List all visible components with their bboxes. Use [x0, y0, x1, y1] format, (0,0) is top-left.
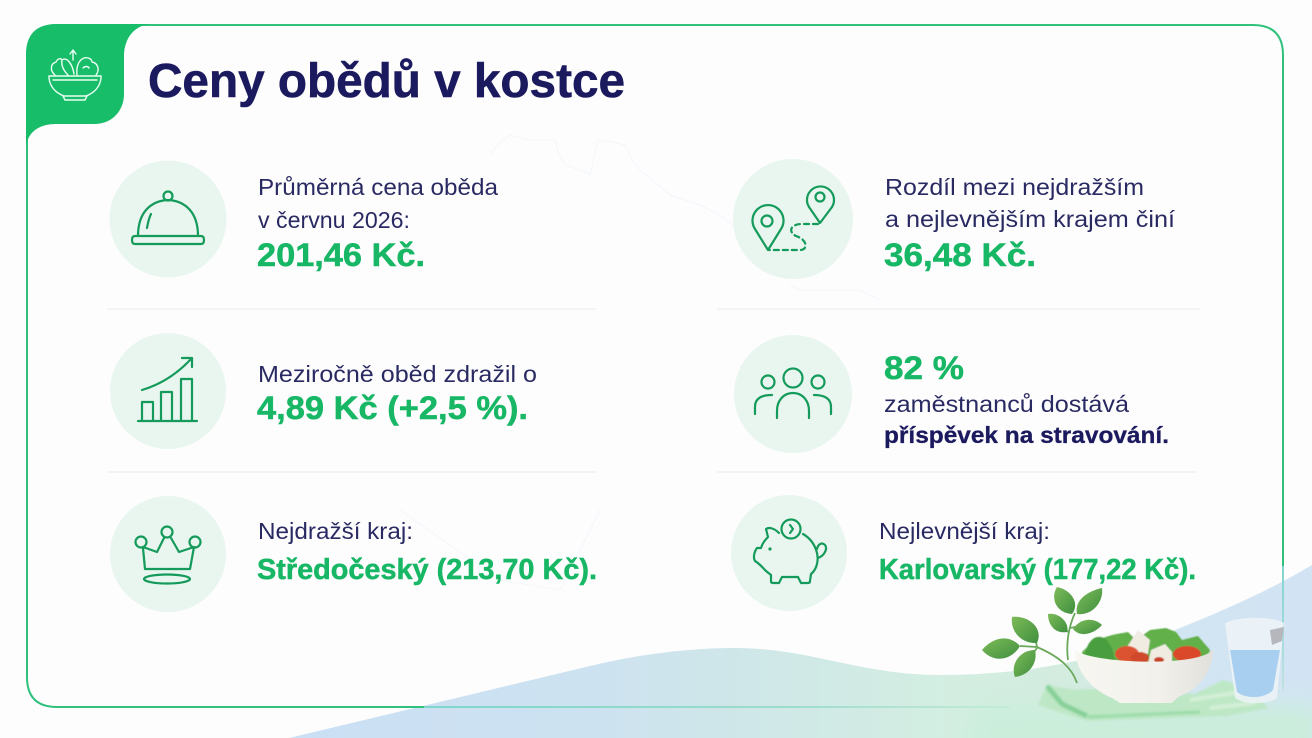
- text block: [257, 518, 597, 586]
- bowl: [1075, 650, 1213, 703]
- text block: 82 %: [884, 350, 964, 386]
- napkin: [1038, 680, 1268, 721]
- glass of water: [1225, 618, 1284, 703]
- text block: 201,46 Kč.: [257, 237, 425, 273]
- salad: [1082, 628, 1210, 664]
- background wave: [289, 565, 1312, 738]
- text block: 4,89 Kč (+2,5 %).: [257, 390, 528, 426]
- panel: regional difference: [733, 159, 1176, 279]
- text block: [884, 350, 1169, 448]
- text block: v červnu 2026:: [258, 207, 410, 233]
- header tab: [26, 24, 151, 148]
- title: Ceny obědů v kostce: [148, 55, 625, 108]
- text block: a nejlevnějším krajem činí: [885, 206, 1176, 232]
- icon: cloche: [110, 160, 226, 278]
- icon: salad bowl: [49, 50, 101, 100]
- text block: Nejdražší kraj:: [258, 518, 413, 544]
- panel: meal allowance: [734, 335, 1169, 453]
- text block: [884, 174, 1176, 273]
- illustration: salad and water: [982, 587, 1284, 721]
- dividers: [107, 309, 1200, 472]
- panel: year on year: [110, 333, 537, 449]
- text block: [257, 361, 537, 426]
- text block: [257, 174, 498, 273]
- text block: příspěvek na stravování.: [884, 422, 1169, 448]
- icon: map pins: [733, 159, 853, 279]
- icon: people: [734, 335, 852, 453]
- text block: Meziročně oběd zdražil o: [258, 361, 537, 387]
- panel: average price: [110, 160, 498, 278]
- text block: 36,48 Kč.: [884, 237, 1036, 273]
- text block: Nejlevnější kraj:: [879, 518, 1050, 544]
- panel: cheapest region: [731, 495, 1196, 611]
- text block: Středočeský (213,70 Kč).: [257, 554, 597, 586]
- icon: crown: [110, 496, 226, 612]
- text block: zaměstnanců dostává: [884, 391, 1129, 417]
- text block: Rozdíl mezi nejdražším: [885, 174, 1144, 200]
- plant sprig: [982, 587, 1102, 683]
- icon: growth chart: [110, 333, 226, 449]
- faint map outline: [400, 135, 880, 590]
- text block: Průměrná cena oběda: [258, 174, 498, 200]
- text block: [879, 518, 1196, 586]
- panel: most expensive region: [110, 496, 597, 612]
- icon: piggy bank: [731, 495, 847, 611]
- text block: Karlovarský (177,22 Kč).: [879, 554, 1196, 586]
